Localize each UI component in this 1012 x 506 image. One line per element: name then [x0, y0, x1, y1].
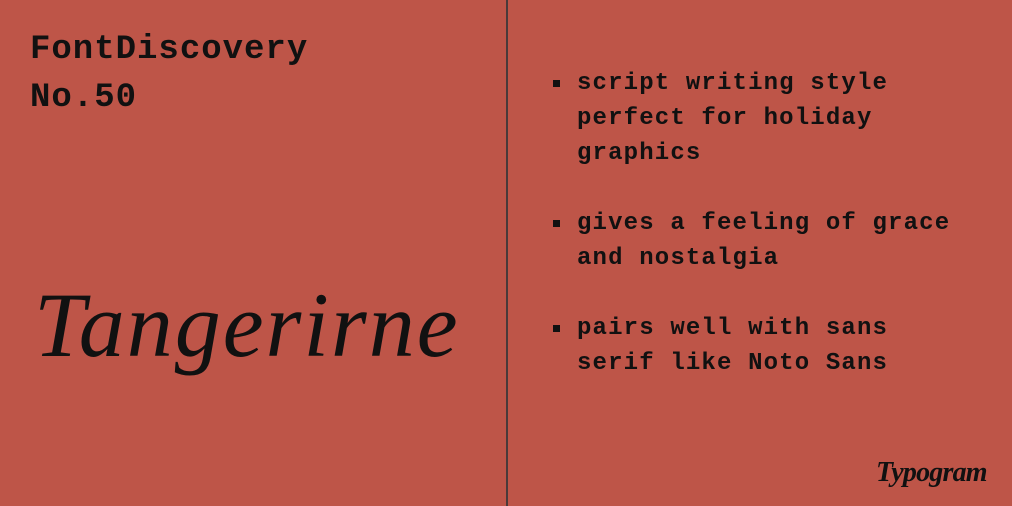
bullet: script writing style: graphics: [577, 140, 701, 167]
bullet: script writing style: [553, 70, 888, 167]
font sample: Tangerine: Tangerirne: [34, 274, 460, 376]
bullet: grace and nostalgia: [553, 210, 950, 272]
title: No.50: [30, 79, 137, 117]
logo: Typogram: Typogram: [876, 457, 987, 488]
bullet: grace and nostalgia: and nostalgia: [577, 245, 779, 272]
divider line: [506, 0, 508, 506]
bullet: pairs well: serif like Noto Sans: [577, 350, 888, 377]
bullet: grace and nostalgia: gives a feeling of grace: [577, 210, 950, 237]
bullet list: [553, 70, 950, 377]
bullet: pairs well: pairs well with sans: [577, 315, 888, 342]
bullet: script writing style: script writing style: [577, 70, 888, 97]
bullet: script writing style: perfect for holiday: [577, 105, 872, 132]
title: FontDiscovery: [30, 31, 308, 69]
title: [30, 31, 308, 117]
bullet: pairs well: [553, 315, 888, 377]
